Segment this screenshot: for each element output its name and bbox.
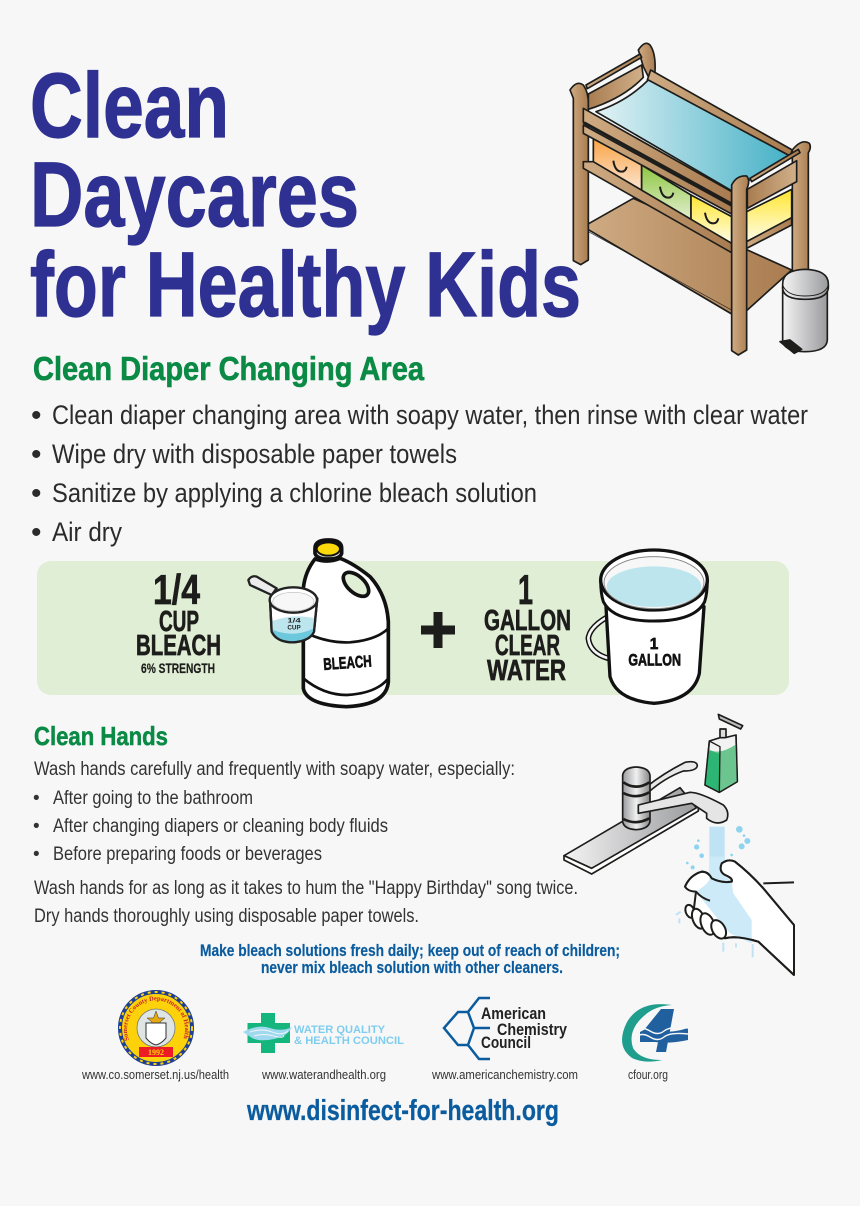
icon: bucket of water	[588, 550, 707, 703]
plus sign	[421, 612, 455, 648]
icon: bleach jug	[303, 540, 388, 707]
bleach quantity text: 1/4	[153, 566, 201, 613]
logo: American Chemistry Council: Council	[481, 1033, 531, 1052]
bleach quantity text: CUP	[159, 606, 199, 638]
logo: Somerset County Department of Health seal: 1992	[148, 1048, 164, 1057]
illustration: changing table and trash can	[570, 43, 828, 355]
title: for Healthy Kids	[30, 234, 581, 336]
water stream	[709, 827, 725, 882]
trash can	[780, 269, 828, 353]
title: Clean	[30, 55, 229, 157]
icon: bleach jug: BLEACH	[323, 652, 372, 674]
panel: bleach solution recipe	[37, 540, 789, 707]
water quantity text: 1	[518, 566, 533, 613]
hand washing instructions: Wash hands for as long as it takes to hum the "Happy Birthday" song twice.	[34, 878, 578, 899]
bulleted steps: •	[31, 516, 42, 549]
logo: Water Quality and Health Council: & HEALTH COUNCIL	[294, 1035, 404, 1047]
main website link: www.disinfect-for-health.org	[246, 1095, 559, 1127]
heading: clean hands: Clean Hands	[34, 721, 168, 751]
safety note: Make bleach solutions fresh daily; keep out of reach of children;	[200, 941, 620, 960]
icon: measuring cup	[248, 576, 317, 642]
hand washing instructions: After changing diapers or cleaning body fluids	[53, 816, 388, 837]
logo: Water Quality and Health Council: WATER QUALITY	[294, 1024, 386, 1036]
logo: American Chemistry Council: Chemistry	[497, 1020, 567, 1039]
logo website addresses: www.americanchemistry.com	[431, 1067, 578, 1082]
bulleted steps: Sanitize by applying a chlorine bleach solution	[52, 478, 537, 508]
hand washing instructions: Wash hands carefully and frequently with soapy water, especially:	[34, 759, 515, 780]
safety note: never mix bleach solution with other cleaners.	[261, 958, 563, 977]
bulleted steps: Wipe dry with disposable paper towels	[52, 439, 457, 469]
bleach quantity text: BLEACH	[136, 630, 221, 662]
hand washing instructions: •	[33, 844, 40, 865]
bleach quantity text: 6% STRENGTH	[141, 660, 215, 676]
bulleted steps	[31, 399, 808, 549]
faucet	[564, 762, 728, 874]
bleach quantity text	[136, 566, 221, 676]
heading: clean diaper changing area: Clean Diaper Changing Area	[33, 350, 425, 387]
hands	[676, 857, 794, 975]
title: Daycares	[30, 144, 359, 246]
logo website addresses: www.co.somerset.nj.us/health	[81, 1067, 229, 1082]
hand washing instructions: After going to the bathroom	[53, 788, 253, 809]
hand washing instructions: •	[33, 816, 40, 837]
soap bubbles	[686, 826, 750, 869]
water quantity text: WATER	[487, 655, 566, 687]
bulleted steps: •	[31, 477, 42, 510]
logo: Water Quality and Health Council	[243, 1013, 404, 1053]
safety note	[200, 941, 620, 977]
icon: measuring cup: 1/4	[287, 617, 301, 624]
icon: bucket of water: GALLON	[628, 651, 681, 670]
soap dispenser	[705, 714, 743, 792]
water quantity text	[484, 566, 571, 687]
hand washing instructions: Before preparing foods or beverages	[53, 844, 322, 865]
hand washing instructions: Dry hands thoroughly using disposable paper towels.	[34, 906, 419, 927]
water quantity text: GALLON	[484, 605, 571, 637]
hand washing instructions: •	[33, 788, 40, 809]
title	[30, 55, 581, 336]
icon: measuring cup: CUP	[287, 624, 301, 631]
illustration: faucet, soap and hands	[564, 714, 794, 975]
hand washing instructions	[33, 759, 578, 927]
water quantity text: CLEAR	[495, 630, 560, 662]
logo website addresses: cfour.org	[628, 1067, 668, 1082]
logo website addresses	[81, 1067, 668, 1082]
logo: American Chemistry Council: American	[481, 1004, 546, 1023]
bulleted steps: •	[31, 438, 42, 471]
icon: bucket of water: 1	[650, 636, 659, 653]
logo: Somerset County Department of Health seal: Somerset County Department of Health	[124, 996, 190, 1041]
bulleted steps: •	[31, 399, 42, 432]
logo: C4	[622, 1004, 688, 1062]
bulleted steps: Air dry	[52, 517, 122, 547]
logo website addresses: www.waterandhealth.org	[261, 1067, 386, 1082]
logo: American Chemistry Council	[444, 998, 567, 1059]
logo: Somerset County Department of Health seal	[118, 990, 194, 1066]
